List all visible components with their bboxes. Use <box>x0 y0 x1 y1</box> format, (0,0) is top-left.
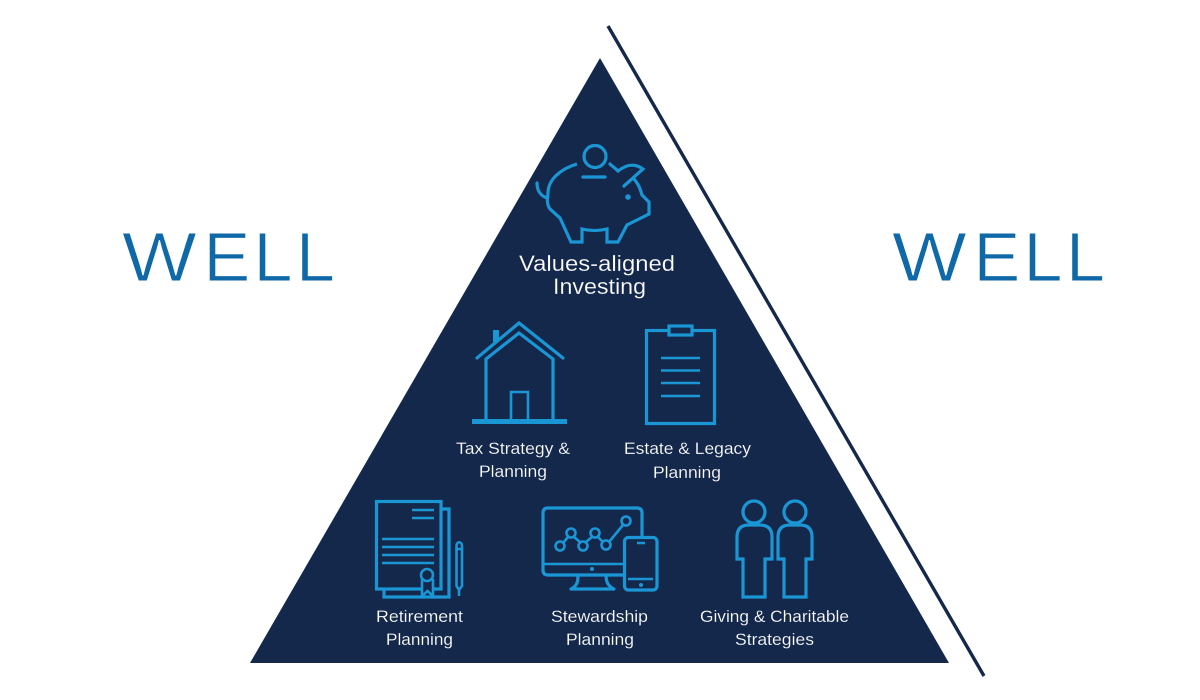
label: Retirement <box>376 607 463 626</box>
heading: right WELL <box>892 217 1105 296</box>
label: Strategies <box>735 630 814 649</box>
item: estate and legacy planning <box>624 326 751 482</box>
item: retirement planning <box>376 502 463 649</box>
label: Giving & Charitable <box>700 607 849 626</box>
label: Planning <box>479 462 547 481</box>
heading: left WELL: ELL <box>204 218 335 296</box>
item: stewardship planning <box>543 508 657 649</box>
icon: monitor and tablet with chart <box>543 508 657 590</box>
label <box>456 439 571 481</box>
label: Planning <box>386 630 453 649</box>
label: Planning <box>566 630 634 649</box>
icon: clipboard <box>646 326 714 424</box>
label <box>624 439 751 482</box>
label <box>700 607 849 649</box>
label <box>376 607 463 649</box>
item: giving and charitable strategies <box>700 501 849 649</box>
diagonal line <box>608 26 984 676</box>
heading: right WELL: ELL <box>974 218 1105 296</box>
icon: documents with seal and pen <box>376 502 462 597</box>
label: Estate & Legacy <box>624 439 751 458</box>
label: Tax Strategy & <box>456 439 571 458</box>
heading: right WELL: W <box>892 217 967 296</box>
label: Values-aligned <box>519 251 675 276</box>
heading: left WELL: W <box>122 217 197 296</box>
triangle background <box>250 58 949 663</box>
label: Planning <box>653 463 721 482</box>
heading: left WELL <box>122 217 335 296</box>
icon: two people <box>737 501 812 597</box>
panel: pyramid <box>250 58 949 663</box>
label <box>551 607 648 649</box>
item: values-aligned investing <box>519 146 675 299</box>
label: Stewardship <box>551 607 648 626</box>
icon: piggy bank with coin <box>537 146 649 242</box>
icon: house <box>472 323 567 424</box>
item: tax strategy and planning <box>456 323 571 481</box>
label <box>519 251 675 299</box>
label: Investing <box>553 274 646 299</box>
